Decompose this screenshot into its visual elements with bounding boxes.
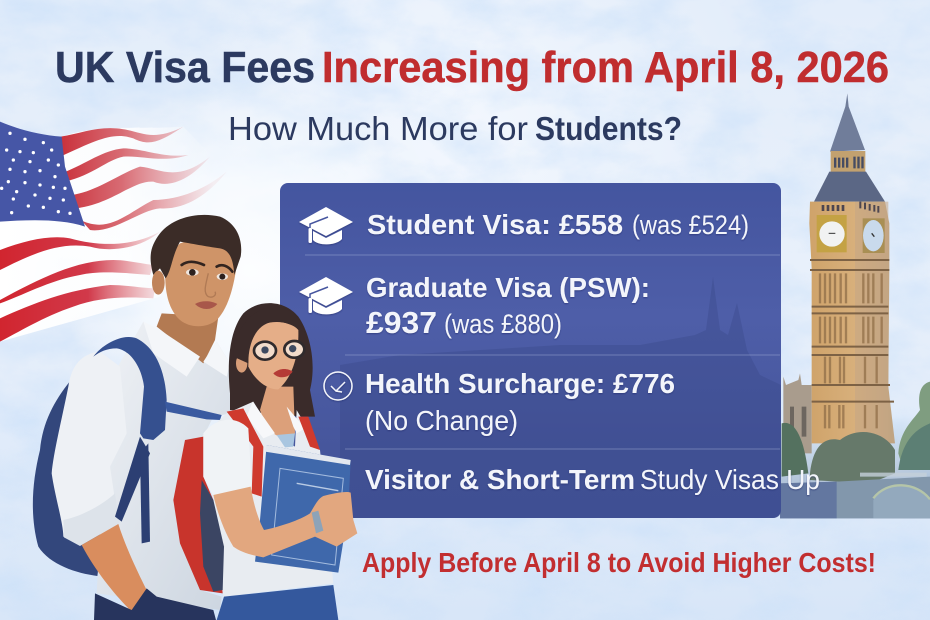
row dividers (305, 255, 780, 449)
illustration: two students (33, 215, 357, 620)
row: student visa (299, 207, 749, 244)
row: visitor and short-term visas (365, 464, 820, 495)
row: health surcharge (324, 368, 675, 436)
clock stage and shaft (809, 202, 895, 443)
panel: fee summary (280, 183, 820, 518)
row: graduate visa (299, 272, 650, 340)
spire (830, 93, 865, 152)
subtitle: How Much More for (228, 110, 528, 147)
parliament silhouette (340, 277, 781, 518)
subtitle: Students? (535, 110, 682, 147)
tower bands (810, 260, 894, 402)
text: graduate visa fee (366, 272, 650, 340)
illustration: american flag (0, 122, 227, 342)
female student (173, 303, 357, 620)
faded riverside band (780, 417, 930, 518)
text: health surcharge fee: Health Surcharge: £776 (365, 368, 675, 399)
text: student visa fee (367, 209, 749, 240)
title (55, 43, 889, 92)
illustration: Big Ben and river scene (780, 93, 930, 518)
text: graduate visa fee: (was £880) (444, 309, 562, 339)
row: visitor and short-term visas: Study Visas Up (640, 464, 820, 495)
row: visitor and short-term visas: Visitor & Short-Term (365, 464, 635, 495)
subtitle (228, 110, 682, 147)
title: Increasing from April 8, 2026 (322, 43, 889, 92)
text: graduate visa fee: £937 (366, 305, 437, 340)
trees and bridge (810, 432, 895, 483)
text: graduate visa fee: Graduate Visa (PSW): (366, 272, 650, 303)
text: health surcharge fee (365, 368, 675, 436)
title: UK Visa Fees (55, 43, 315, 92)
icon: graduation cap (299, 207, 353, 244)
male student (33, 215, 241, 620)
clock faces (817, 215, 847, 252)
text: student visa fee: (was £524) (632, 210, 749, 240)
icon: graduation cap (299, 277, 353, 314)
text: student visa fee: Student Visa: £558 (367, 209, 623, 240)
call to action: Apply Before April 8 to Avoid Higher Costs! (362, 547, 876, 578)
text: health surcharge fee: (No Change) (365, 405, 518, 436)
icon: check circle (324, 372, 352, 400)
